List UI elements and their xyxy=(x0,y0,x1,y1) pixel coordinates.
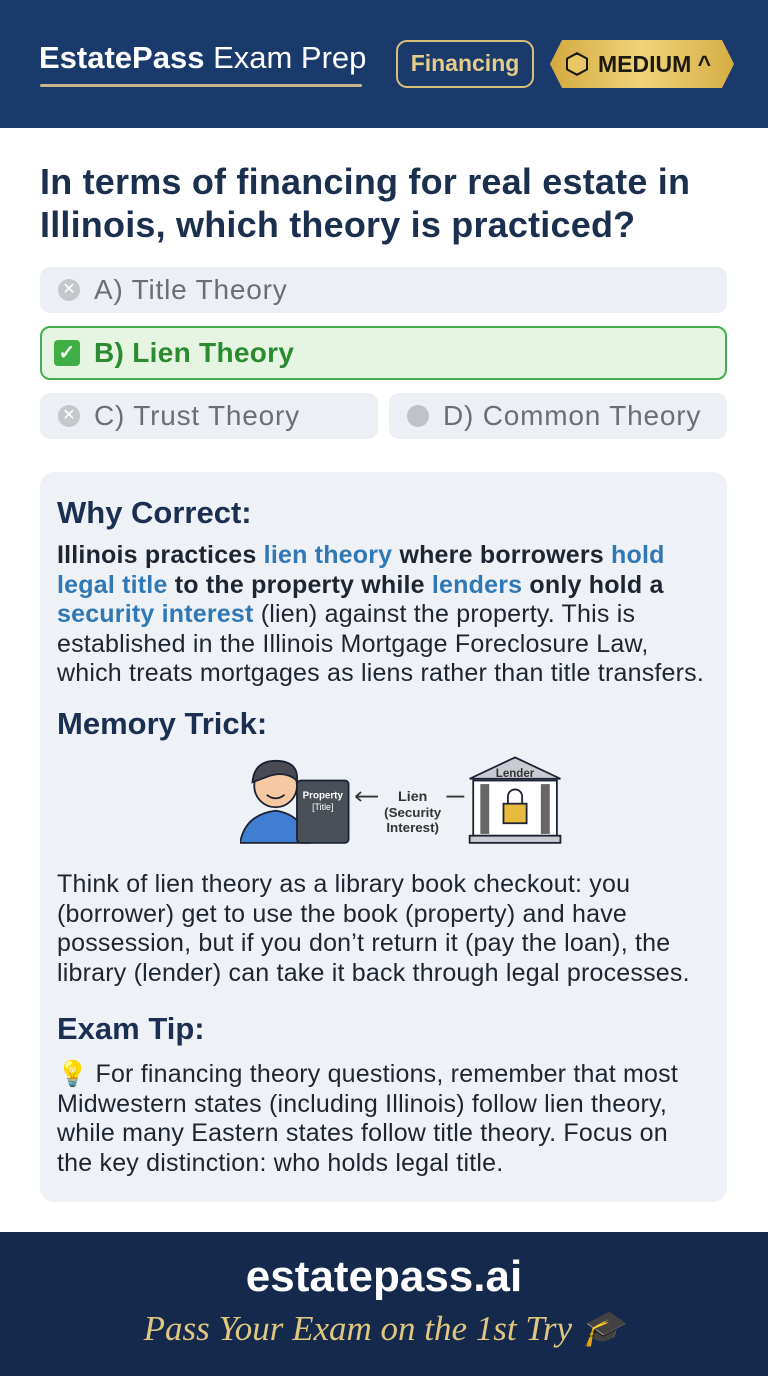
arrow lien: Lien xyxy=(398,789,427,805)
bank: Lender xyxy=(496,768,535,780)
why text: legal title to the property while lenders only hold a xyxy=(57,571,664,599)
badge: medium: MEDIUM ^ xyxy=(598,51,711,77)
book: Property xyxy=(303,790,343,801)
tip text: while many Eastern states follow title theory. Focus on xyxy=(57,1119,668,1147)
option C xyxy=(40,393,378,439)
header xyxy=(0,0,768,128)
heading: exam tip: Exam Tip: xyxy=(57,1011,205,1046)
tip text: 💡 For financing theory questions, remember that most xyxy=(57,1060,678,1088)
memory text: possession, but if you don’t return it (pay the loan), the xyxy=(57,929,670,957)
heading: why correct: Why Correct: xyxy=(57,495,252,530)
option B correct: B) Lien Theory xyxy=(94,337,294,368)
option C: C) Trust Theory xyxy=(94,400,300,431)
option D: D) Common Theory xyxy=(443,400,701,431)
why text: established in the Illinois Mortgage Foreclosure Law, xyxy=(57,630,648,658)
tip text: the key distinction: who holds legal title. xyxy=(57,1149,503,1177)
heading: memory trick: Memory Trick: xyxy=(57,706,267,741)
option A: ✕ xyxy=(62,281,76,298)
option C: ✕ xyxy=(62,407,76,424)
badge: Financing: Financing xyxy=(411,50,519,76)
question: Illinois, which theory is practiced? xyxy=(40,204,635,245)
tagline: Pass Your Exam on the 1st Try 🎓 xyxy=(144,1309,624,1348)
arrow lien: Interest) xyxy=(386,820,439,835)
question xyxy=(40,161,690,245)
badge: medium xyxy=(550,40,734,88)
illustration xyxy=(240,756,562,844)
logo: EstatePass Exam Prep xyxy=(39,40,366,75)
bank xyxy=(470,757,560,843)
book xyxy=(297,781,349,843)
option A xyxy=(40,267,727,313)
arrow lien: (Security xyxy=(384,805,442,820)
option B correct: ✓ xyxy=(58,342,76,364)
panel: explanation xyxy=(40,472,727,1202)
book: [Title] xyxy=(312,802,333,812)
underline xyxy=(40,84,362,87)
why text: which treats mortgages as liens rather than title transfers. xyxy=(57,659,704,687)
person xyxy=(240,761,309,843)
option A: A) Title Theory xyxy=(94,274,288,305)
question: In terms of financing for real estate in xyxy=(40,161,690,202)
memory text: library (lender) can take it back through legal processes. xyxy=(57,959,690,987)
memory text xyxy=(57,870,690,987)
memory text: (borrower) get to use the book (property) and have xyxy=(57,900,627,928)
tip text xyxy=(57,1060,678,1177)
badge: Financing xyxy=(396,40,534,88)
why text: Illinois practices lien theory where borrowers hold xyxy=(57,541,665,569)
footer site: estatepass.ai xyxy=(246,1252,522,1301)
memory text: Think of lien theory as a library book checkout: you xyxy=(57,870,630,898)
why text xyxy=(57,541,704,687)
footer xyxy=(0,1232,768,1376)
option B correct xyxy=(40,326,727,380)
tip text: Midwestern states (including Illinois) follow lien theory, xyxy=(57,1090,667,1118)
why text: security interest (lien) against the property. This is xyxy=(57,600,635,628)
option D xyxy=(389,393,727,439)
arrow lien xyxy=(356,789,464,835)
